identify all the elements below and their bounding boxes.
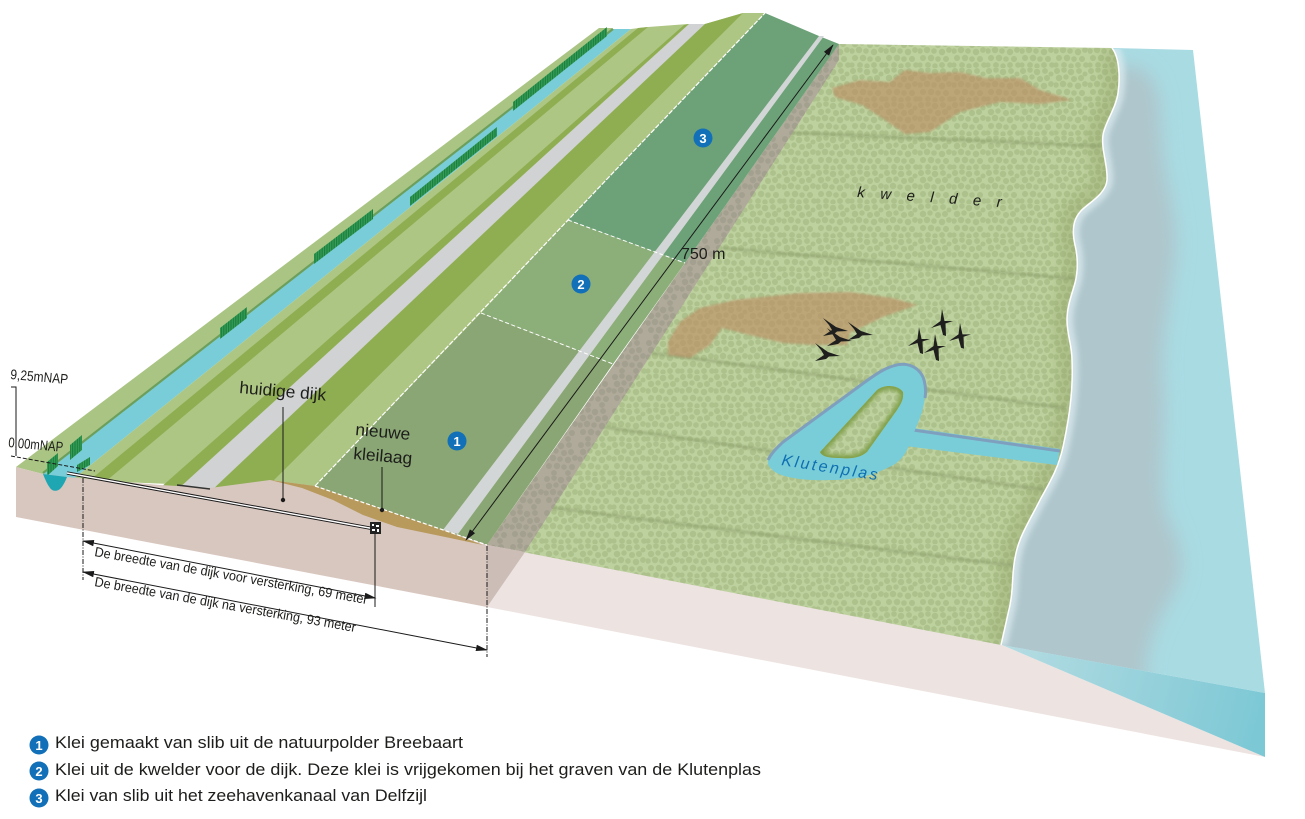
legend item 1: Klei gemaakt van slib uit de natuurpolder Breebaart [55, 733, 463, 752]
numbered marker 2 [572, 274, 590, 294]
panel: light side of ground block [487, 552, 1265, 757]
legend item 3: 3 [35, 791, 43, 806]
birds flock [815, 309, 971, 361]
numbered marker 2: 2 [577, 277, 585, 292]
label: nieuwe kleilaag [353, 420, 413, 512]
length arrow 750 m: 750 m [681, 246, 725, 263]
old dike baseline [67, 473, 381, 534]
klutenplas lake with channel [768, 364, 1060, 484]
numbered marker 3 [694, 128, 712, 148]
kwelder label: kwelder [857, 184, 1018, 212]
numbered marker 1 [448, 432, 466, 450]
gravel strip along dike toe [487, 44, 839, 552]
height scale: 9,25mNAP [10, 366, 69, 387]
legend [30, 733, 761, 808]
label: huidige dijk [239, 378, 327, 502]
label: nieuwe kleilaag: kleilaag [353, 444, 413, 468]
panel: ground cross-section [16, 467, 525, 607]
brown patch: upper mudflat [832, 70, 1072, 134]
numbered marker 1: 1 [453, 434, 461, 449]
dimension: width after reinforcement [83, 546, 487, 657]
legend item 3: Klei van slib uit het zeehavenkanaal van Delfzijl [55, 786, 427, 805]
clay panel 3 [568, 13, 839, 263]
panel: sea [1002, 48, 1265, 757]
legend item 2: 2 [35, 764, 43, 779]
panel: dike strips [16, 13, 839, 545]
clay panel 1 [315, 313, 613, 545]
dimension: width before reinforcement: De breedte van de dijk voor versterking, 69 meter [93, 544, 369, 607]
new clay layer section [270, 480, 487, 545]
brown patch: middle mudflat [668, 292, 917, 358]
height scale [8, 366, 95, 471]
label: nieuwe kleilaag: nieuwe [355, 420, 411, 444]
height scale: 0,00mNAP [8, 434, 64, 455]
legend item 2: Klei uit de kwelder voor de dijk. Deze klei is vrijgekomen bij het graven van de Klutenplas [55, 760, 761, 779]
island in lake [820, 386, 903, 458]
reed clumps along canal [47, 27, 607, 476]
dimension: width before reinforcement [83, 478, 376, 607]
length arrow 750 m [466, 45, 833, 540]
numbered marker 3: 3 [699, 131, 707, 146]
klutenplas label: Klutenplas [780, 452, 879, 484]
legend item 1: 1 [35, 738, 43, 753]
clay panel 2 [481, 220, 685, 364]
canal cross-section [43, 474, 67, 491]
panel: kwelder salt marsh [487, 44, 1119, 645]
label: huidige dijk: huidige dijk [239, 378, 327, 405]
dimension: width after reinforcement: De breedte van de dijk na versterking, 93 meter [93, 574, 358, 635]
